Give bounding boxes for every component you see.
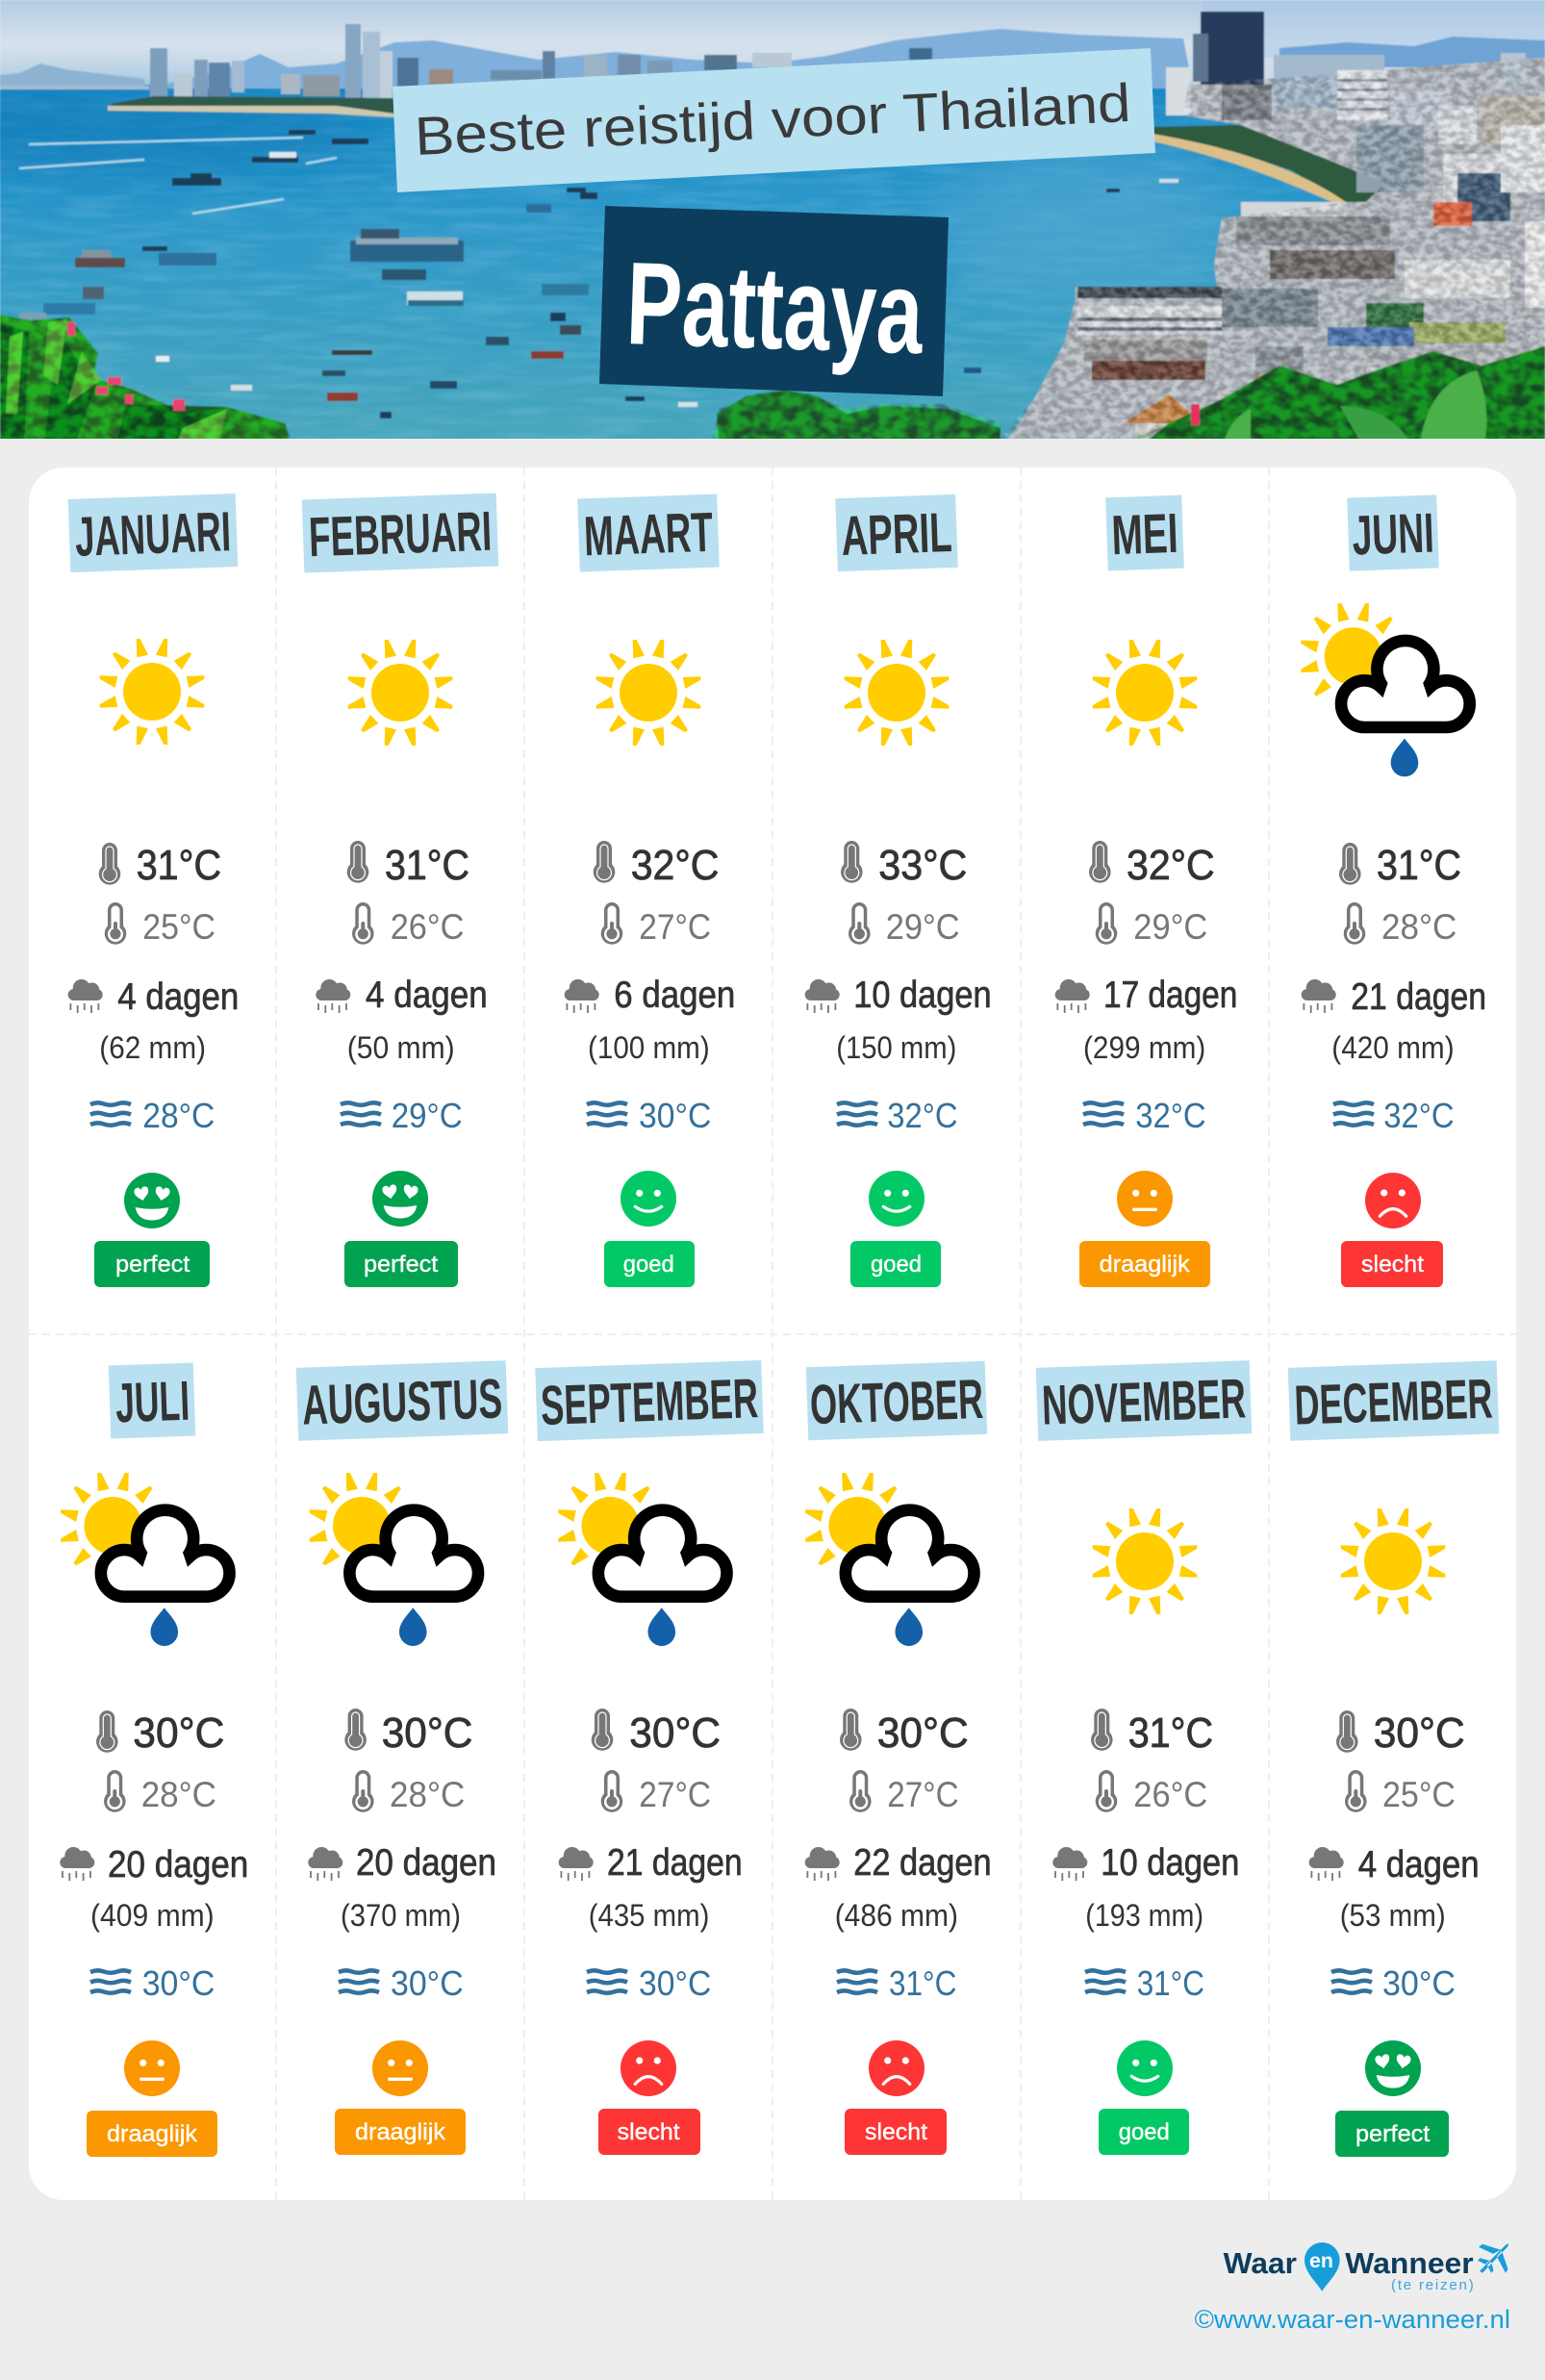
icon: sad face [869, 2040, 924, 2096]
sea temperature [587, 1096, 711, 1135]
icon: sun, cloud and rain [1301, 603, 1470, 776]
rainfall: (150 mm) [836, 1030, 956, 1065]
sea temperature: 31°C [1137, 1963, 1204, 2003]
minimum temperature [601, 902, 711, 947]
rating badge: perfect [1355, 2121, 1431, 2147]
maximum temperature: 31°C [1128, 1709, 1213, 1757]
heading januari: JANUARI [74, 500, 232, 569]
maximum temperature [1091, 1709, 1213, 1757]
rain days [805, 975, 992, 1016]
rainfall: (53 mm) [1340, 1898, 1446, 1933]
icon: sun [845, 640, 949, 746]
month: maart [565, 494, 735, 1287]
rainfall: (409 mm) [90, 1898, 215, 1933]
minimum temperature: 29°C [886, 907, 960, 947]
sea temperature: 30°C [639, 1963, 711, 2003]
rating badge [1341, 1241, 1443, 1287]
minimum temperature [1096, 902, 1207, 947]
heading april [835, 494, 958, 571]
sea temperature [587, 1963, 711, 2003]
icon: sun [596, 640, 700, 746]
icon: sun, cloud and rain [558, 1473, 727, 1646]
month: november [1036, 1360, 1252, 2155]
sea temperature: 32°C [1383, 1096, 1455, 1135]
city texture [1000, 58, 1545, 443]
icon: sun [1341, 1508, 1445, 1614]
minimum temperature: 25°C [1382, 1775, 1456, 1814]
rain days [316, 975, 488, 1016]
heading februari [302, 493, 498, 573]
heading september: SEPTEMBER [540, 1367, 759, 1437]
heading oktober: OKTOBER [809, 1368, 984, 1436]
maximum temperature [1336, 1709, 1465, 1757]
rainfall: (486 mm) [835, 1898, 958, 1933]
sea temperature: 30°C [1382, 1963, 1456, 2003]
rating badge [335, 2109, 466, 2155]
minimum temperature [849, 1770, 959, 1814]
icon: good face [1117, 2040, 1173, 2096]
rating badge [845, 2109, 947, 2155]
heading november [1036, 1360, 1252, 1441]
rating badge: perfect [364, 1252, 439, 1278]
city [1000, 58, 1545, 452]
rainfall: (100 mm) [588, 1030, 710, 1065]
minimum temperature: 26°C [391, 907, 464, 947]
maximum temperature [592, 1709, 721, 1757]
maximum temperature: 31°C [137, 842, 221, 889]
rating badge: draaglijk [355, 2119, 446, 2145]
sea temperature: 29°C [392, 1096, 463, 1135]
panel: climate calendar [29, 468, 1516, 2200]
rating badge [604, 1241, 695, 1287]
heading mei: MEI [1110, 502, 1179, 567]
rain days [1302, 976, 1486, 1018]
sea temperature [339, 1963, 464, 2003]
rain days: 4 dagen [1358, 1844, 1480, 1886]
wakes [19, 138, 337, 214]
icon: sun [100, 639, 204, 745]
sea temperature [1083, 1096, 1206, 1135]
icon: sun, cloud and rain [805, 1473, 975, 1646]
icon: neutral face [1117, 1171, 1173, 1227]
rating badge [1099, 2109, 1189, 2155]
maximum temperature [840, 1709, 969, 1757]
icon: good face [869, 1171, 924, 1227]
maximum temperature: 31°C [385, 842, 469, 889]
rain days [1055, 975, 1237, 1016]
wordmark: Wanneer [1345, 2246, 1474, 2280]
month: januari [68, 494, 239, 1287]
heading juni: JUNI [1351, 502, 1435, 567]
rating badge [87, 2111, 217, 2157]
sea temperature [1085, 1963, 1204, 2003]
rain days: 6 dagen [614, 975, 735, 1016]
maximum temperature [347, 841, 469, 889]
maximum temperature [96, 1709, 224, 1757]
heading maart [577, 494, 720, 572]
rain days [308, 1842, 496, 1884]
month: oktober [805, 1361, 992, 2155]
minimum temperature [352, 1770, 465, 1814]
icon: sun, cloud and rain [310, 1473, 478, 1646]
tagline: (te reizen) [1391, 2277, 1474, 2293]
rating badge: draaglijk [107, 2121, 198, 2147]
rating badge [850, 1241, 941, 1287]
sea temperature: 28°C [142, 1096, 215, 1135]
rating badge: goed [1119, 2119, 1170, 2145]
boats [19, 130, 1178, 418]
minimum temperature: 27°C [639, 907, 711, 947]
sea temperature: 32°C [887, 1096, 958, 1135]
rain days [559, 1842, 743, 1884]
maximum temperature [594, 841, 719, 889]
rain days: 22 dagen [853, 1842, 992, 1884]
minimum temperature [352, 902, 464, 947]
maximum temperature [99, 842, 221, 889]
sea temperature: 30°C [142, 1963, 215, 2003]
heading september [535, 1360, 764, 1441]
minimum temperature: 27°C [887, 1775, 959, 1814]
icon: airplane [1478, 2243, 1508, 2273]
rain days [805, 1842, 992, 1884]
heading november: NOVEMBER [1041, 1367, 1247, 1437]
month: augustus [296, 1360, 508, 2155]
rain days [565, 975, 735, 1016]
website credit: ©www.waar-en-wanneer.nl [1195, 2305, 1510, 2334]
sea temperature: 30°C [391, 1963, 464, 2003]
logo: Waar en Wanneer: Waar [1224, 2246, 1297, 2280]
icon: good face [621, 1171, 676, 1227]
rain days: 20 dagen [356, 1842, 496, 1884]
maximum temperature: 30°C [629, 1709, 721, 1757]
icon: sun [1093, 640, 1197, 746]
sea temperature [341, 1096, 463, 1135]
sea temperature [1331, 1963, 1456, 2003]
heading januari [68, 494, 238, 572]
rain days: 21 dagen [1351, 976, 1486, 1018]
icon: perfect face [1365, 2040, 1421, 2096]
minimum temperature [105, 902, 215, 947]
maximum temperature: 30°C [877, 1709, 969, 1757]
rating badge: slecht [618, 2119, 680, 2145]
minimum temperature [601, 1770, 711, 1814]
maximum temperature [344, 1709, 472, 1757]
rain days: 21 dagen [607, 1842, 743, 1884]
heading augustus: AUGUSTUS [301, 1367, 503, 1437]
rain days [1052, 1842, 1239, 1884]
sea temperature [1333, 1096, 1455, 1135]
rain days [1309, 1844, 1480, 1886]
rain days [68, 976, 239, 1018]
rainfall: (435 mm) [589, 1898, 709, 1933]
rating badge [344, 1241, 458, 1287]
maximum temperature: 33°C [878, 842, 967, 889]
month: juli [60, 1362, 248, 2157]
month: september [535, 1360, 764, 2155]
minimum temperature [1344, 902, 1456, 947]
title [599, 206, 949, 396]
rainfall: (50 mm) [347, 1030, 455, 1065]
rainfall: (420 mm) [1331, 1030, 1455, 1065]
month: mei [1055, 495, 1237, 1287]
logo: Waar en Wanneer [1224, 2242, 1508, 2293]
sea temperature: 30°C [639, 1096, 711, 1135]
minimum temperature: 27°C [639, 1775, 711, 1814]
heading juli: JULI [114, 1370, 190, 1434]
sea temperature: 32°C [1135, 1096, 1206, 1135]
rainfall: (62 mm) [99, 1030, 206, 1065]
rain days: 20 dagen [108, 1844, 248, 1886]
sea temperature [837, 1963, 956, 2003]
rain days: 10 dagen [1101, 1842, 1239, 1884]
minimum temperature [1096, 1770, 1207, 1814]
rating badge: perfect [115, 1252, 190, 1278]
rating badge: slecht [1361, 1252, 1424, 1278]
minimum temperature [104, 1770, 216, 1814]
rain days: 4 dagen [117, 976, 239, 1018]
minimum temperature: 29°C [1133, 907, 1207, 947]
icon: sun, cloud and rain [61, 1473, 230, 1646]
icon: neutral face [372, 2040, 428, 2096]
month: februari [302, 493, 498, 1287]
rating badge [1335, 2111, 1449, 2157]
subtitle banner: Beste reistijd voor Thailand [414, 72, 1132, 166]
month: december [1288, 1360, 1499, 2157]
minimum temperature: 26°C [1133, 1775, 1207, 1814]
rating badge: goed [871, 1252, 922, 1278]
foliage [0, 315, 291, 452]
sea temperature [90, 1963, 215, 2003]
minimum temperature: 28°C [390, 1775, 465, 1814]
minimum temperature [1345, 1770, 1456, 1814]
rain days: 4 dagen [366, 975, 488, 1016]
pin word: en [1309, 2250, 1333, 2272]
sea temperature [837, 1096, 958, 1135]
hero photo: Pattaya bay [0, 0, 1545, 455]
maximum temperature: 30°C [1374, 1709, 1465, 1757]
icon: sad face [1365, 1173, 1421, 1228]
maximum temperature: 30°C [133, 1709, 224, 1757]
minimum temperature: 28°C [141, 1775, 216, 1814]
subtitle banner [393, 48, 1155, 192]
heading juni [1347, 494, 1439, 571]
maximum temperature: 31°C [1377, 842, 1461, 889]
rain days: 10 dagen [853, 975, 992, 1016]
rainfall: (370 mm) [341, 1898, 461, 1933]
foliage texture [0, 308, 1545, 439]
heading juli [109, 1362, 195, 1439]
rating badge [1079, 1241, 1210, 1287]
icon: perfect face [124, 1173, 180, 1228]
minimum temperature: 25°C [142, 907, 215, 947]
rainfall: (193 mm) [1085, 1898, 1203, 1933]
icon: sad face [621, 2040, 676, 2096]
rating badge: goed [623, 1252, 674, 1278]
month: april [805, 494, 992, 1287]
title: Pattaya [624, 238, 925, 378]
sea temperature: 31°C [889, 1963, 956, 2003]
rain days: 17 dagen [1103, 975, 1237, 1016]
heading april: APRIL [840, 501, 953, 568]
rainfall: (299 mm) [1083, 1030, 1205, 1065]
minimum temperature: 28°C [1381, 907, 1456, 947]
rating badge: slecht [865, 2119, 927, 2145]
maximum temperature: 32°C [631, 842, 719, 889]
icon: sun [1093, 1508, 1197, 1614]
heading oktober [806, 1361, 987, 1440]
icon: neutral face [124, 2040, 180, 2096]
heading augustus [296, 1360, 508, 1441]
left skyline [150, 24, 932, 98]
month: juni [1301, 494, 1486, 1287]
icon: map pin [1304, 2242, 1340, 2291]
heading februari: FEBRUARI [308, 500, 493, 569]
maximum temperature [1339, 842, 1461, 889]
icon: sun [348, 640, 452, 746]
maximum temperature: 32°C [1127, 842, 1215, 889]
heading maart: MAART [583, 501, 714, 568]
rating badge [94, 1241, 210, 1287]
maximum temperature [1089, 841, 1215, 889]
rating badge: draaglijk [1100, 1252, 1191, 1278]
minimum temperature [848, 902, 960, 947]
beach and trees [1152, 125, 1385, 207]
maximum temperature [841, 841, 967, 889]
rating badge [598, 2109, 700, 2155]
sea temperature [90, 1096, 215, 1135]
maximum temperature: 30°C [382, 1709, 472, 1757]
heading mei [1105, 495, 1184, 570]
icon: perfect face [372, 1171, 428, 1227]
rain days [60, 1844, 248, 1886]
